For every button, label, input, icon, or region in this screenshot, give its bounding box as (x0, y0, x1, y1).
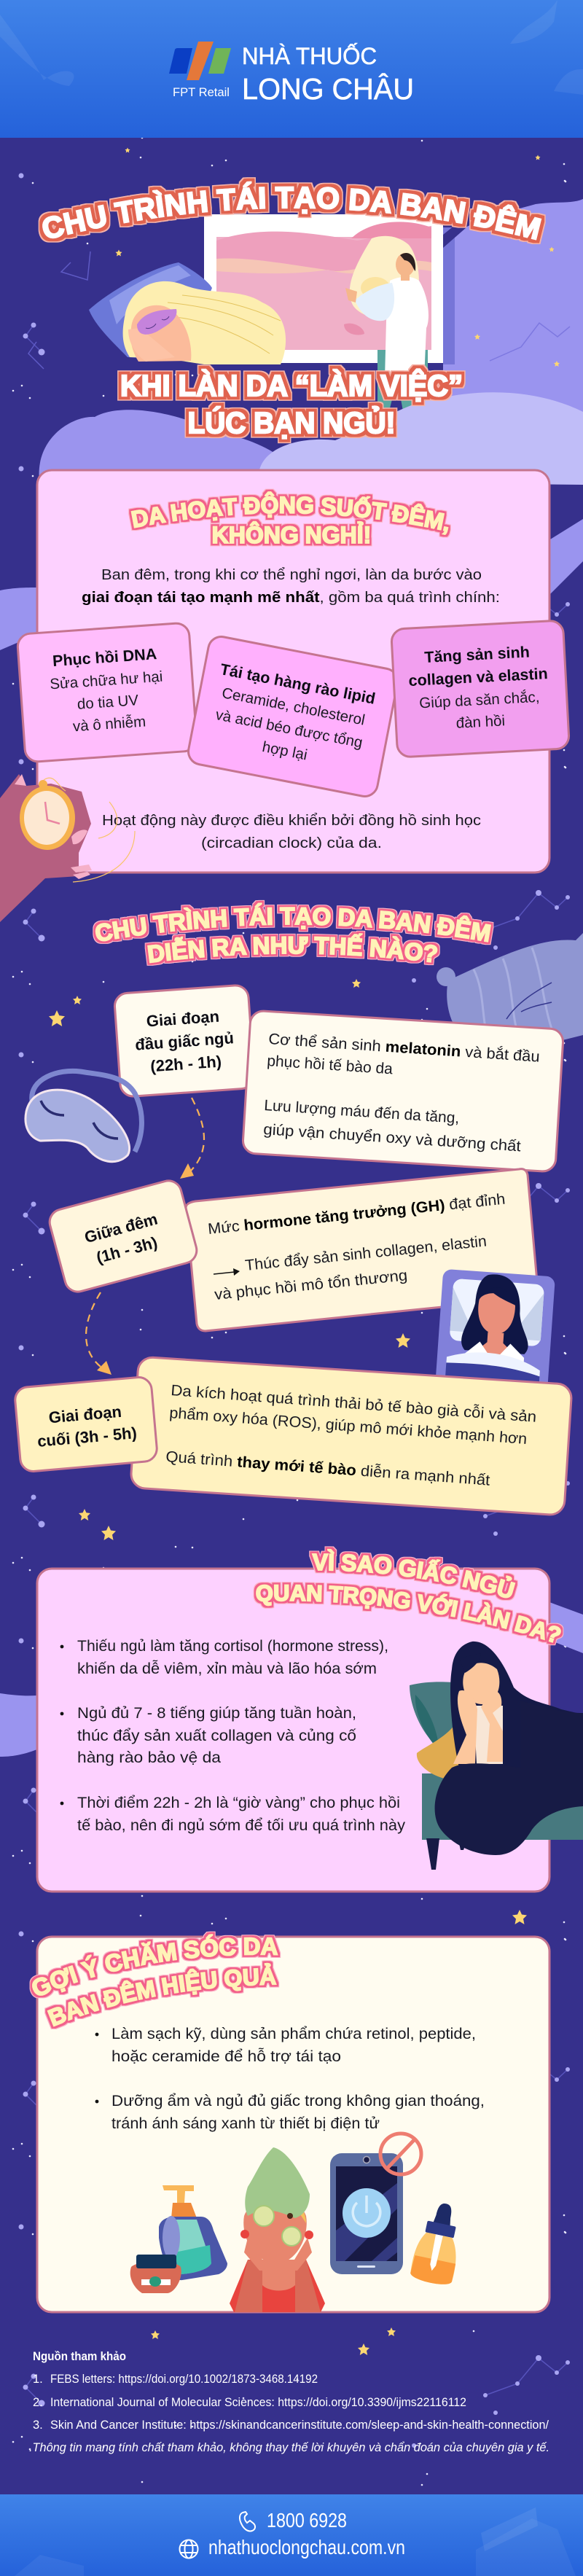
icon: pillow (437, 933, 583, 1046)
references (29, 2349, 549, 2454)
main title: KHI LÀN DA “LÀM VIỆC” (120, 369, 463, 402)
references: FEBS letters: https://doi.org/10.1002/1873-3468.14192 (50, 2373, 318, 2386)
stage 1 label: đầu giấc ngủ (134, 1029, 235, 1054)
card: tái tạo hàng rào lipid: hợp lại (261, 738, 309, 763)
stage 2 content (186, 1169, 538, 1331)
heading: BAN ĐÊM HIỆU QUẢ (44, 1960, 280, 2029)
closing text (102, 812, 481, 851)
violet sky wave (443, 199, 583, 481)
stage 3 label (14, 1376, 158, 1472)
icon: pump bottle (159, 2185, 227, 2280)
body list: Làm sạch kỹ, dùng sản phẩm chứa retinol, peptide, (111, 2026, 476, 2042)
body list: hoặc ceramide để hỗ trợ tái tạo (111, 2048, 341, 2065)
card: phục hồi DNA: Sửa chữa hư hại (50, 668, 163, 692)
stage 2 label: (1h - 3h) (94, 1233, 160, 1267)
card: tăng sản sinh collagen: đàn hồi (455, 712, 506, 732)
closing text: (circadian clock) của da. (201, 835, 382, 851)
card: phục hồi DNA (17, 622, 197, 762)
arrow: sub-point (214, 1268, 240, 1276)
intro text: Ban đêm, trong khi cơ thể nghỉ ngơi, làn da bước vào (101, 566, 482, 583)
logo: NHÀ THUỐC (242, 43, 377, 69)
icon: globe (179, 2540, 198, 2559)
stage 2 label: Giữa đêm (82, 1210, 160, 1246)
card: tăng sản sinh collagen (391, 620, 569, 757)
icon: hand holding clock (0, 774, 135, 922)
panel: vì sao giấc ngủ quan trọng (0, 1546, 583, 1892)
logo: LONG CHÂU (242, 72, 414, 106)
stage 3 label: Giai đoạn (48, 1402, 122, 1426)
references: International Journal of Molecular Sciences: https://doi.org/10.3390/ijms22116112 (50, 2396, 466, 2409)
card: tăng sản sinh collagen: Giúp da săn chắc, (419, 689, 540, 711)
stage 1 content: Cơ thể sản sinh melatonin và bắt đầu (268, 1031, 540, 1066)
phone number: 1800 6928 (267, 2509, 347, 2532)
arrow: stage 1 to 2 (180, 1098, 204, 1179)
card: tăng sản sinh collagen: collagen và elastin (408, 665, 548, 690)
card: tăng sản sinh collagen: Tăng sản sinh (424, 643, 530, 666)
stars: timeline (49, 979, 410, 1540)
footer band (0, 2494, 583, 2576)
references: .Thông tin mang tính chất tham khảo, không thay thế lời khuyên và chẩn đoán của chuyên gia y tế. (29, 2441, 549, 2454)
heading: QUAN TRỌNG VỚI LÀN DA? (254, 1582, 564, 1646)
heading: KHÔNG NGHỈ! (212, 522, 371, 548)
stage 1 label (114, 985, 255, 1097)
header band (0, 0, 583, 138)
main title: LÚC BẠN NGỦ! (188, 406, 395, 440)
stage 1 content: giúp vận chuyển oxy và dưỡng chất (263, 1121, 522, 1155)
body list: khiến da dễ viêm, xỉn màu và lão hóa sớm (77, 1660, 377, 1677)
body list: tế bào, nên đi ngủ sớm để tối ưu quá trình này (77, 1817, 406, 1834)
intro text (82, 566, 500, 606)
stage 1 content (242, 1010, 564, 1172)
icon: woman with towel and cucumber (230, 2147, 325, 2312)
stage 1 label: (22h - 1h) (150, 1053, 222, 1075)
doctor (345, 253, 429, 426)
stage 3 content (130, 1357, 572, 1515)
hero illustration (28, 147, 583, 485)
logo: FPT Retail (173, 85, 230, 99)
references: 2. (33, 2396, 43, 2409)
stage 1 content: phục hồi tế bào da (267, 1053, 394, 1077)
body list: Thiếu ngủ làm tăng cortisol (hormone stress), (77, 1638, 388, 1655)
constellations: hero (28, 251, 570, 369)
body list (60, 1638, 406, 1834)
stage 2 content: và phục hồi mô tổn thương (214, 1267, 408, 1303)
sleeping woman (89, 262, 286, 364)
icon: prohibition sign (380, 2134, 421, 2174)
references: 1. (33, 2373, 43, 2386)
body list: Ngủ đủ 7 - 8 tiếng giúp tăng tuần hoàn, (77, 1705, 356, 1722)
body list: Thời điểm 22h - 2h là “giờ vàng” cho phục hồi (77, 1795, 400, 1811)
heading: chu trình diễn ra như thế nào: DIỄN RA NHƯ THẾ NÀO? (144, 930, 440, 966)
references: Nguồn tham khảo (33, 2349, 126, 2363)
heading: GỢI Ý CHĂM SÓC DA (29, 1932, 281, 1999)
heading: VÌ SAO GIẤC NGỦ (309, 1546, 518, 1601)
logo (169, 42, 414, 106)
stars: hero (115, 147, 560, 367)
heading: chu trình diễn ra như thế nào (93, 899, 494, 966)
card: tái tạo hàng rào lipid (186, 634, 400, 799)
body list: hàng rào bảo vệ da (77, 1749, 221, 1766)
window (204, 214, 466, 364)
icon: phone with power button and no sign (330, 2134, 421, 2274)
main title: CHU TRÌNH TÁI TẠO DA BAN ĐÊM (38, 177, 546, 244)
panel: gợi ý chăm sóc da (29, 1932, 551, 2314)
card: phục hồi DNA: do tia UV (77, 692, 139, 713)
icon: cream jar (130, 2255, 181, 2293)
stage 3 label: cuối (3h - 5h) (36, 1424, 138, 1451)
stage 1 label: Giai đoạn (146, 1007, 220, 1031)
body list: tránh ánh sáng xanh từ thiết bị điện tử (111, 2115, 380, 2132)
references: Skin And Cancer Institute: https://skinandcancerinstitute.com/sleep-and-skin-health-connection/ (50, 2419, 549, 2432)
stage 1 content: Lưu lượng máu đến da tăng, (264, 1097, 460, 1127)
body list: Dưỡng ẩm và ngủ đủ giấc trong không gian thoáng, (111, 2093, 485, 2109)
stage 2 label (47, 1178, 200, 1295)
card: tái tạo hàng rào lipid: Tái tạo hàng rào lipid (219, 660, 377, 708)
body list: thúc đẩy sản xuất collagen và củng cố (77, 1728, 356, 1744)
stars: footer area (151, 1910, 527, 2355)
heading: chu trình diễn ra như thế nào: CHU TRÌNH TÁI TẠO DA BAN ĐÊM (93, 899, 494, 945)
heading (29, 1932, 281, 2029)
card: tái tạo hàng rào lipid: và acid béo được tổng (214, 706, 364, 752)
main title (38, 177, 546, 443)
body list (95, 2026, 485, 2132)
clouds (39, 392, 583, 485)
icon: phone (240, 2512, 255, 2531)
website: nhathuoclongchau.com.vn (208, 2536, 405, 2559)
stage 3 content: Da kích hoạt quá trình thải bỏ tế bào già cỗi và sản (171, 1382, 537, 1426)
icon: sleep mask (26, 1071, 141, 1162)
references: 3. (33, 2419, 43, 2432)
heading (254, 1546, 564, 1646)
panel: da hoạt động suốt đêm (0, 469, 583, 922)
stage 3 content: Quá trình thay mới tế bào diễn ra mạnh nhất (165, 1448, 490, 1489)
closing text: Hoạt động này được điều khiển bởi đồng hồ sinh học (102, 812, 481, 829)
stage 2 content: Thúc đẩy sản sinh collagen, elastin (244, 1233, 488, 1274)
arrow: stage 2 to 3 (86, 1292, 111, 1375)
icon: tired woman on couch (410, 1642, 583, 1870)
icon: woman sleeping in bed (434, 1269, 555, 1407)
card: phục hồi DNA: và ô nhiễm (72, 713, 146, 735)
intro text: giai đoạn tái tạo mạnh mẽ nhất , gồm ba quá trình chính: (82, 589, 500, 606)
icon: serum bottle (409, 2199, 468, 2287)
card: phục hồi DNA: Phục hồi DNA (52, 645, 157, 670)
stage 3 content: phẩm oxy hóa (ROS), giúp mô mới khỏe mạnh hơn (169, 1405, 528, 1448)
card: tái tạo hàng rào lipid: Ceramide, cholesterol (221, 684, 367, 729)
heading: DA HOẠT ĐỘNG SUỐT ĐÊM, (128, 488, 451, 538)
stage 2 content: Mức hormone tăng trưởng (GH) đạt đỉnh (207, 1191, 506, 1238)
